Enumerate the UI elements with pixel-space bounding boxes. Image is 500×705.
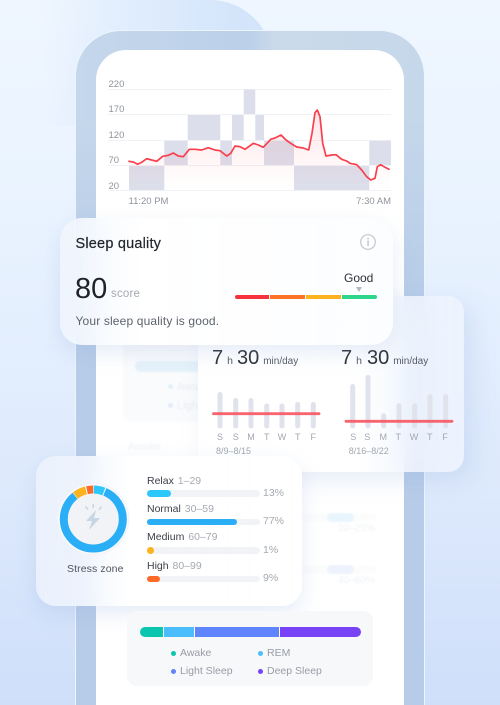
week 1 chart: 8/9–8/15 <box>216 446 251 456</box>
sleep stage blocks <box>129 90 391 190</box>
week 2 chart: S <box>364 432 370 442</box>
sleep chart <box>108 79 391 207</box>
y axis labels <box>108 79 124 192</box>
legend: rem: REM <box>267 647 290 659</box>
time labels: 11:20 PM <box>128 196 169 207</box>
blurred screen content: Light <box>177 400 201 412</box>
row: medium: Medium 60–79 <box>147 531 217 543</box>
week 2 chart: T <box>396 432 402 442</box>
y axis labels: 70 <box>108 155 119 166</box>
y axis labels: 120 <box>108 130 124 141</box>
score: 80 <box>75 273 107 305</box>
description: Your sleep quality is good. <box>76 314 219 328</box>
blurred screen content: Awake <box>128 441 161 453</box>
panel: weekly sleep duration <box>198 296 464 472</box>
blurred screen content: 20–25% <box>338 523 375 534</box>
week 1 chart: 7 h30 min/day <box>212 347 298 369</box>
row: normal: 77% <box>263 515 284 527</box>
week 1 chart: S <box>217 432 223 442</box>
icon: lightning <box>85 504 102 530</box>
row: high: 9% <box>263 572 278 584</box>
icon: info <box>360 234 376 250</box>
time labels: 7:30 AM <box>356 196 391 207</box>
blurred screen content <box>128 360 375 586</box>
background blob <box>40 0 273 126</box>
row: relax <box>147 475 284 498</box>
week 1 chart: W <box>278 432 287 442</box>
heart rate area <box>129 110 389 190</box>
week 2 chart: T <box>427 432 433 442</box>
week 1 chart: T <box>295 432 301 442</box>
donut label: Stress zone <box>67 563 124 575</box>
row: high: High 80–99 <box>147 560 202 572</box>
y axis labels: 220 <box>108 79 124 90</box>
heart rate line <box>129 110 389 180</box>
quality gauge <box>235 271 377 299</box>
panel: sleep stage legend <box>127 611 373 686</box>
week 1 chart: T <box>264 432 270 442</box>
heading: Sleep quality <box>76 236 161 252</box>
blurred screen content: Awake <box>177 381 210 393</box>
week 2 chart: 8/16–8/22 <box>349 446 389 456</box>
week 2 chart <box>341 347 452 456</box>
phone frame <box>75 30 425 705</box>
row: normal <box>147 503 284 527</box>
week 2 chart: 7 h30 min/day <box>341 347 428 369</box>
legend: awake: Awake <box>180 647 211 659</box>
week 1 chart: S <box>233 432 239 442</box>
y axis labels: 20 <box>108 181 119 192</box>
quality gauge: Good <box>344 271 373 285</box>
week 2 chart: S <box>350 432 356 442</box>
row: medium <box>147 531 278 556</box>
stage bar <box>140 627 361 636</box>
y axis labels: 170 <box>108 104 124 115</box>
blurred screen content: 40–60% <box>338 575 375 586</box>
legend: deep sleep: Deep Sleep <box>267 665 322 677</box>
legend: light sleep: Light Sleep <box>180 665 233 677</box>
panel: stress zone <box>36 456 302 606</box>
row: relax: 13% <box>263 486 284 498</box>
week 2 chart: W <box>410 432 419 442</box>
donut chart <box>58 485 129 553</box>
row: medium: 1% <box>263 544 278 556</box>
week 2 chart: F <box>442 432 448 442</box>
panel: sleep quality: score <box>111 288 140 300</box>
week 2 chart: M <box>380 432 387 442</box>
time labels <box>128 196 391 207</box>
week 1 chart: M <box>247 432 255 442</box>
phone screen <box>96 50 404 705</box>
panel: sleep quality <box>60 218 393 345</box>
week 1 chart <box>212 347 319 456</box>
row: relax: Relax 1–29 <box>147 475 201 487</box>
row: normal: Normal 30–59 <box>147 503 214 515</box>
row: high <box>147 560 278 584</box>
week 1 chart: F <box>311 432 317 442</box>
